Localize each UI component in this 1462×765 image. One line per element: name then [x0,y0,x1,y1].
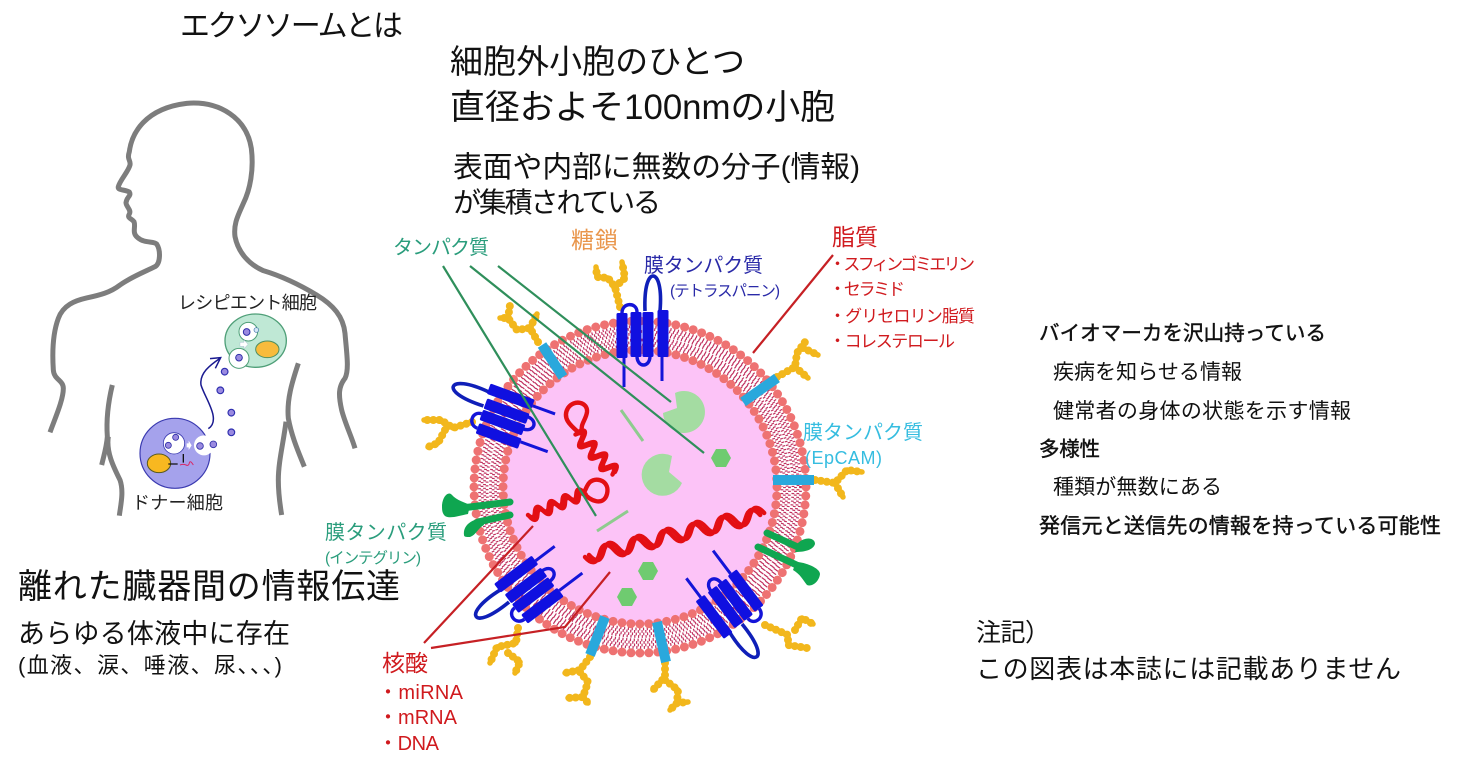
recipient cell label: レシピエント細胞 [178,293,317,313]
note: この図表は本誌には記載ありません [976,654,1401,684]
icon: human body outline [50,103,355,516]
label: tetraspanin: (テトラスパニン) [670,283,780,300]
label: tetraspanin [644,254,780,300]
leader lines: protein [443,266,704,516]
title: エクソソームとは [180,10,403,43]
text block: biomarker properties: 多様性 [1039,438,1100,461]
label: lipids: 脂質 [832,224,878,250]
leader lines: nucleic acid [424,526,610,648]
note: 注記） [976,619,1050,647]
heading: small extracellular vesicle: 直径およそ100nmの小胞 [450,88,835,127]
label: EpCAM: (EpCAM) [805,448,882,468]
vesicle lumen [503,350,777,624]
label: nucleic acids: ・mRNA [378,707,458,729]
label: integrin: 膜タンパク質 [325,521,447,544]
diagram: exosome [424,262,862,710]
label: lipids [829,224,975,351]
leader line: lipid [753,255,833,353]
label: EpCAM [803,421,923,468]
label: nucleic acids: 核酸 [382,650,428,676]
text block: biomarker properties: 種類が無数にある [1053,476,1222,499]
text block: body fluids: (血液、涙、唾液、尿、、、) [18,653,282,678]
label: tetraspanin: 膜タンパク質 [644,254,763,277]
text block: biomarker properties [1039,322,1441,538]
membrane protein: tetraspanins [441,276,786,666]
heading: inter-organ communication: 離れた臓器間の情報伝達 [18,568,400,606]
text block: body fluids [18,619,290,678]
label: lipids: ・セラミド [829,280,905,299]
heading: small extracellular vesicle [450,43,835,127]
label: nucleic acids: ・miRNA [378,682,464,704]
text block: molecules on the surface and inside [453,151,860,218]
icon: donor cell [140,418,219,488]
membrane protein: integrins [442,493,820,585]
donor cell label: ドナー細胞 [132,493,223,513]
text block: molecules on the surface and inside: 表面や内部に無数の分子(情報) [453,151,860,184]
text block: molecules on the surface and inside: が集積されている [453,187,661,218]
label: EpCAM: 膜タンパク質 [803,421,923,444]
icon: secreted exosomes and arrow [201,358,235,436]
text block: body fluids: あらゆる体液中に存在 [18,619,290,649]
lipid bilayer [474,321,806,653]
note [976,619,1401,684]
nucleic acids [528,403,764,562]
label: lipids: ・グリセロリン脂質 [829,307,975,326]
label: integrin [325,521,447,567]
membrane protein: EpCAM bars [542,345,814,662]
text block: biomarker properties: バイオマーカを沢山持っている [1039,322,1326,345]
label: lipids: ・スフィンゴミエリン [829,254,975,274]
proteins inside the vesicle [597,391,731,606]
label: nucleic acids [378,650,464,755]
label: glycan: 糖鎖 [571,227,618,253]
label: integrin: (インテグリン) [325,549,421,567]
heading: small extracellular vesicle: 細胞外小胞のひとつ [450,43,745,80]
glycans [424,262,862,710]
text block: biomarker properties: 疾病を知らせる情報 [1053,361,1242,384]
text block: biomarker properties: 健常者の身体の状態を示す情報 [1053,400,1351,423]
label: lipids: ・コレステロール [829,332,955,351]
icon: recipient cell [225,314,286,368]
label: protein: タンパク質 [393,236,489,259]
text block: biomarker properties: 発信元と送信先の情報を持っている可能性 [1039,515,1441,538]
label: nucleic acids: ・DNA [378,733,440,755]
